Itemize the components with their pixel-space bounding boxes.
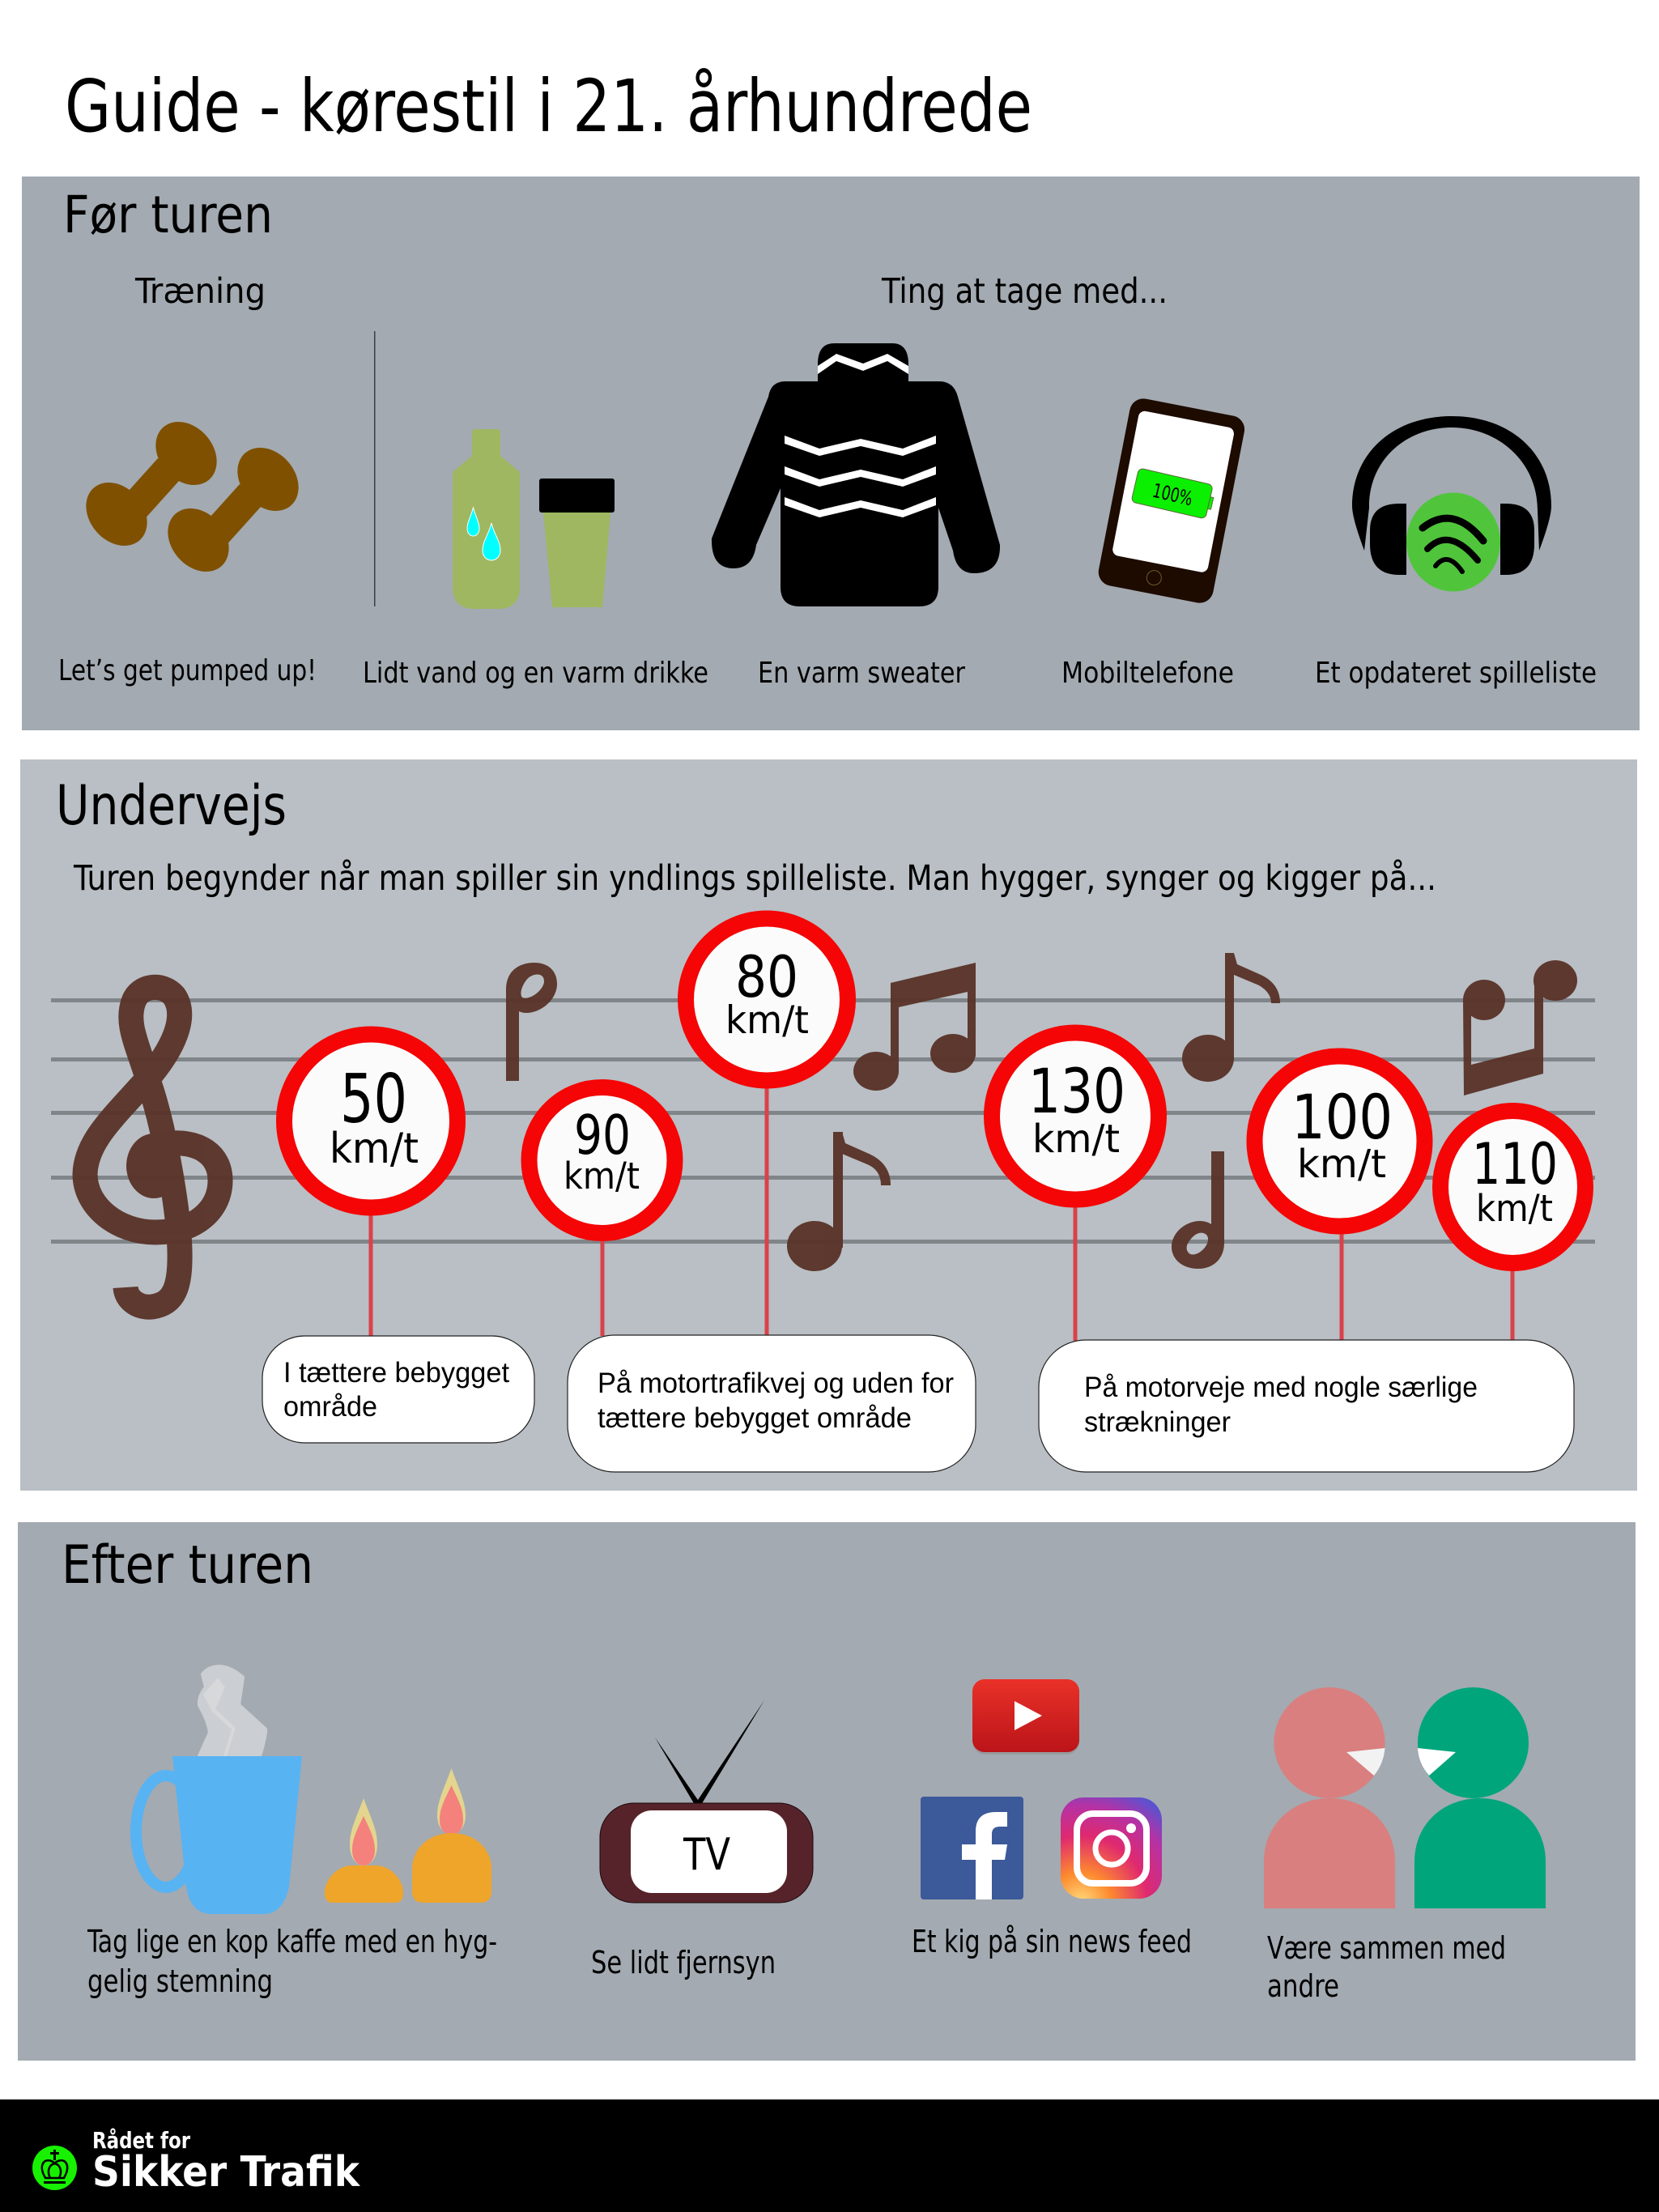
icon: cup with lid xyxy=(539,479,615,607)
caption: playlist: Et opdateret spilleliste xyxy=(1315,657,1597,690)
intro text: Turen begynder når man spiller sin yndlings spilleliste. Man hygger, synger og kigger på... xyxy=(73,858,1436,899)
icon: sweater xyxy=(712,343,1000,606)
icon: YouTube xyxy=(972,1679,1079,1755)
callout: urban area: område xyxy=(283,1391,377,1423)
icon: Facebook xyxy=(921,1797,1023,1899)
caption: together: andre xyxy=(1267,1968,1339,2004)
callout: urban area: I tættere bebygget xyxy=(283,1357,509,1389)
icon: Instagram xyxy=(1061,1797,1162,1899)
speed sign: 80 km/t xyxy=(686,918,848,1080)
panel: Før turen xyxy=(22,177,1640,730)
caption: sweater: En varm sweater xyxy=(758,657,966,690)
subheading: Ting at tage med: Ting at tage med... xyxy=(881,271,1168,312)
logo text: Sikker Trafik: Sikker Trafik xyxy=(92,2148,361,2197)
icon: dumbbells xyxy=(74,410,311,584)
icon: half note top xyxy=(506,963,557,1081)
caption: together xyxy=(1267,1930,1506,2004)
icon: eighth note lower xyxy=(787,1132,891,1271)
speed sign: 110 km/t xyxy=(1440,1111,1585,1263)
callout: urban area xyxy=(262,1336,534,1443)
callout: motor road xyxy=(568,1335,976,1472)
icon: headphones with music logo xyxy=(1352,416,1551,591)
speed sign: 130 km/t xyxy=(992,1033,1159,1200)
footer bar xyxy=(0,2099,1659,2212)
speed sign: 130 km/t: km/t xyxy=(1032,1117,1120,1162)
speed sign: 100 km/t xyxy=(1255,1056,1425,1226)
icon: phone with full battery: 100% xyxy=(1151,479,1195,510)
title: Guide - kørestil i 21. århundrede xyxy=(65,64,1032,148)
caption: TV: Se lidt fjernsyn xyxy=(591,1945,776,1980)
logo text: Rådet for: Rådet for xyxy=(92,2127,191,2154)
icon: two people talking xyxy=(1264,1687,1546,1908)
icon: inverted beamed notes xyxy=(1463,960,1577,1095)
caption: coffee xyxy=(87,1924,497,1999)
music notes and clef xyxy=(85,953,1577,1307)
icon: water bottle xyxy=(453,429,520,609)
icon: beamed notes xyxy=(853,963,976,1091)
speed sign: 90 km/t xyxy=(530,1087,675,1233)
icon: phone with full battery xyxy=(1096,396,1247,606)
caption: coffee: Tag lige en kop kaffe med en hyg- xyxy=(87,1924,497,1959)
icon: eighth note upper xyxy=(1182,953,1280,1082)
callout: motorway xyxy=(1039,1340,1574,1472)
heading: Undervejs: Undervejs xyxy=(56,774,287,838)
icon: treble clef xyxy=(85,987,220,1307)
speed sign: 110 km/t: km/t xyxy=(1476,1187,1553,1230)
callout: motor road: På motortrafikvej og uden for xyxy=(598,1368,954,1399)
caption: drinks: Lidt vand og en varm drikke xyxy=(363,657,708,690)
logo: crown badge xyxy=(32,2146,77,2190)
panel: Undervejs xyxy=(20,759,1637,1491)
caption: coffee: gelig stemning xyxy=(87,1963,273,1999)
speed sign: 90 km/t: km/t xyxy=(564,1155,640,1197)
speed sign: 130 km/t: 130 xyxy=(1028,1055,1125,1127)
speed sign: 90 km/t: 90 xyxy=(574,1104,631,1167)
subheading: Træning: Træning xyxy=(134,271,266,312)
icon: candles xyxy=(325,1768,491,1903)
caption: together: Være sammen med xyxy=(1267,1930,1506,1966)
callout: motor road: tættere bebygget område xyxy=(598,1402,912,1434)
callout: motorway: strækninger xyxy=(1084,1406,1231,1438)
icon: coffee mug with steam xyxy=(136,1667,302,1914)
speed sign: 50 km/t xyxy=(284,1035,457,1208)
caption: pumped up: Let’s get pumped up! xyxy=(58,654,317,687)
connector lines xyxy=(371,1085,1512,1341)
speed sign: 80 km/t: 80 xyxy=(735,944,798,1010)
speed sign: 50 km/t: km/t xyxy=(330,1125,419,1173)
speed sign: 110 km/t: 110 xyxy=(1472,1131,1558,1197)
heading: Før turen: Før turen xyxy=(63,185,273,245)
icon: television: TV xyxy=(683,1829,730,1880)
caption: news feed: Et kig på sin news feed xyxy=(912,1924,1192,1959)
callout: motorway: På motorveje med nogle særlige xyxy=(1084,1372,1478,1403)
icon: half note lower xyxy=(1172,1151,1224,1269)
icon: television xyxy=(600,1700,813,1903)
speed sign: 100 km/t: 100 xyxy=(1291,1081,1393,1153)
speed sign: 100 km/t: km/t xyxy=(1297,1142,1386,1187)
heading: Efter turen: Efter turen xyxy=(62,1535,313,1596)
speed sign: 50 km/t: 50 xyxy=(340,1060,407,1138)
caption: phone: Mobiltelefone xyxy=(1061,657,1234,690)
panel: Efter turen xyxy=(18,1522,1636,2061)
speed sign: 80 km/t: km/t xyxy=(725,998,809,1043)
